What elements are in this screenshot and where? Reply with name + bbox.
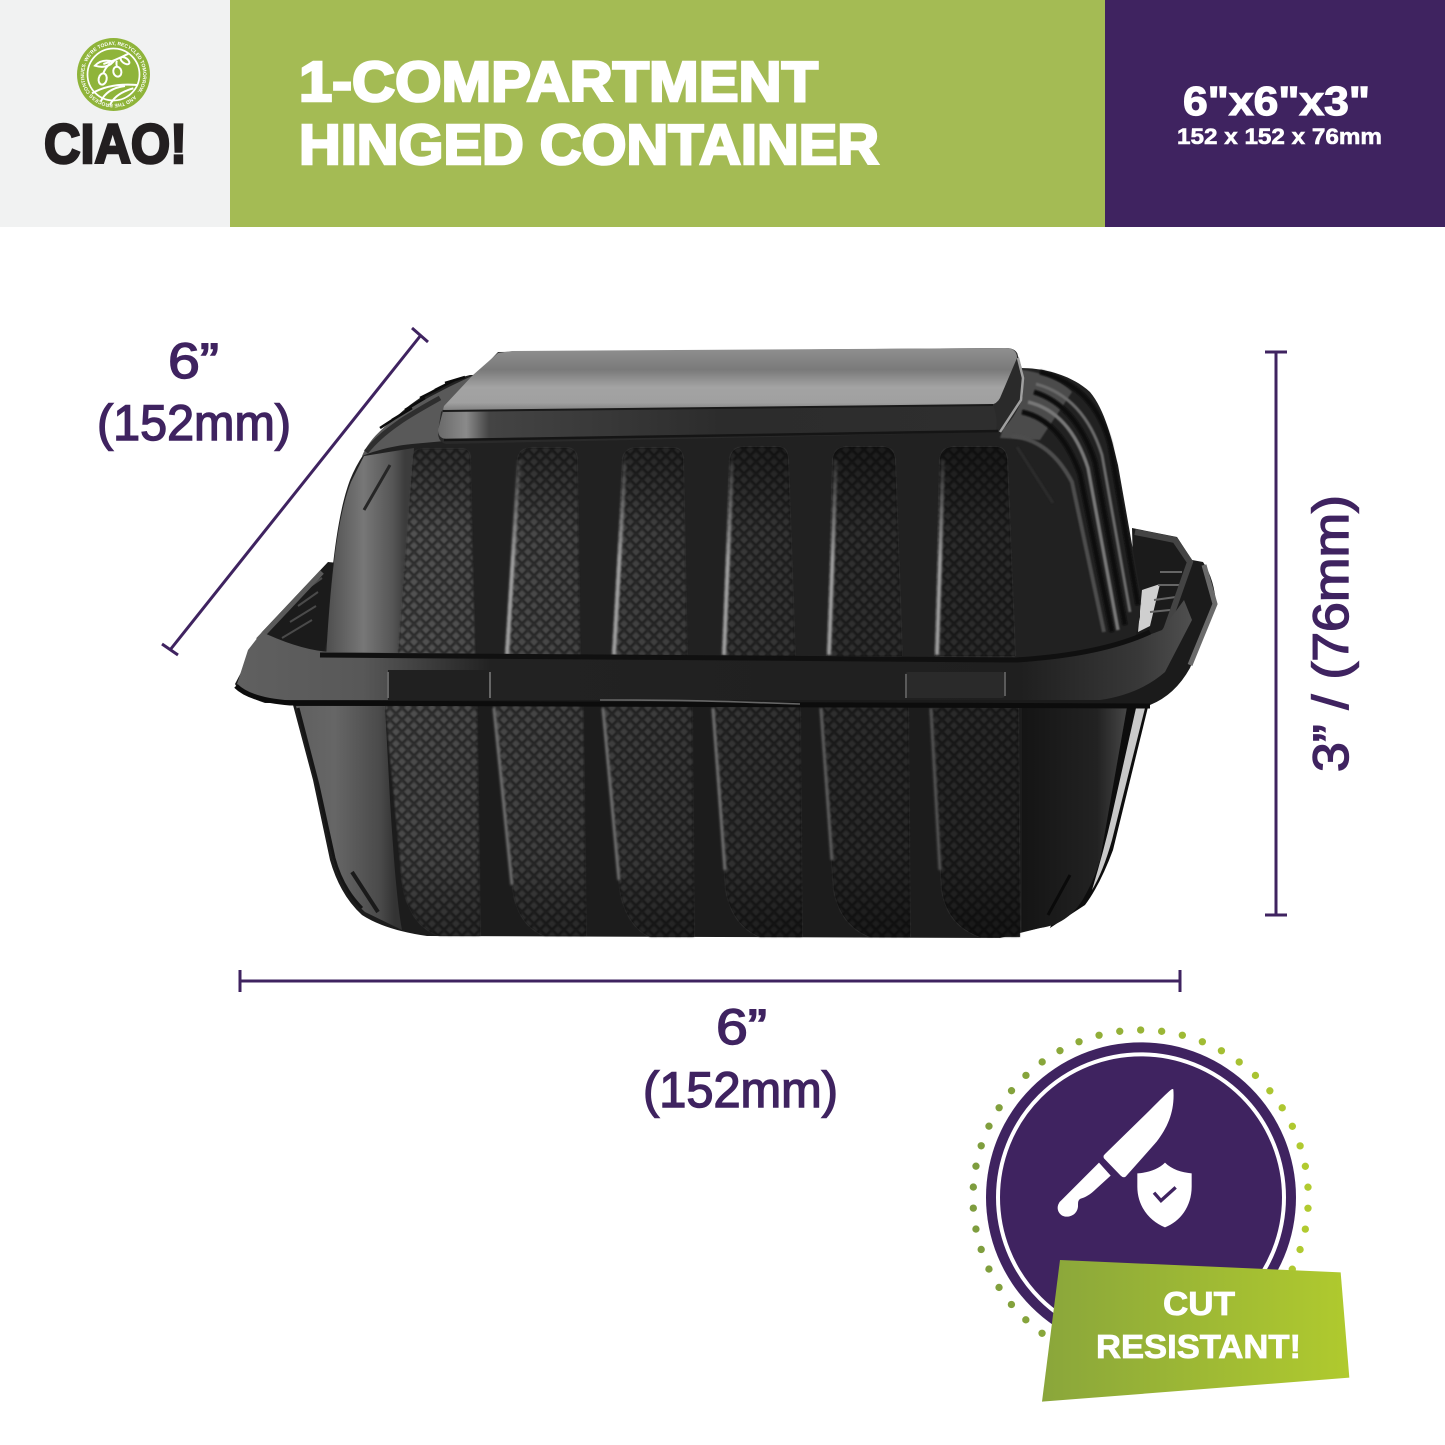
upper textured panels <box>398 447 1015 656</box>
lower body <box>293 705 1148 938</box>
left curved side <box>326 448 414 658</box>
dimension line: depth <box>162 328 428 655</box>
left flange grips <box>258 572 322 640</box>
icon: recycled olive logo seal: AND THE PROCESS CONTINUES. WE'RE TODAY, RECYCLED TOMORROW. <box>80 42 146 108</box>
width label: 6” <box>716 999 767 1055</box>
white inner ring <box>998 1054 1284 1340</box>
right edge with pale sliver <box>1050 707 1148 928</box>
width label: (152mm) <box>643 1062 838 1118</box>
depth label: (152mm) <box>97 395 291 451</box>
banner text <box>1096 1285 1301 1365</box>
panel edge highlights <box>507 460 943 655</box>
title <box>299 50 879 177</box>
logo panel <box>0 0 230 227</box>
banner text: CUT <box>1163 1285 1235 1322</box>
header bar <box>0 0 1445 227</box>
top lid tray <box>438 348 1023 444</box>
green banner <box>1042 1260 1349 1402</box>
rim flange silhouette <box>235 528 1216 705</box>
icon: shield with check <box>1137 1163 1192 1227</box>
width label <box>643 999 838 1118</box>
icon: knife <box>1058 1089 1174 1217</box>
height label: 3” / (76mm) <box>1303 495 1359 772</box>
product photo: black hinged container <box>235 348 1216 938</box>
front rim band <box>236 600 1192 706</box>
depth label: 6” <box>168 333 219 389</box>
size panel <box>1105 0 1445 227</box>
left shelf and ribs <box>362 376 472 456</box>
cut resistant badge <box>973 1030 1349 1402</box>
title: HINGED CONTAINER <box>299 113 879 177</box>
brand name: CIAO! <box>44 112 187 175</box>
right shelf highlight <box>1000 370 1072 440</box>
depth label <box>97 333 291 451</box>
dotted ring <box>973 1030 1308 1365</box>
banner text: RESISTANT! <box>1096 1328 1301 1365</box>
dimension line: height <box>1265 352 1287 915</box>
right ribs <box>1012 372 1138 632</box>
upper lid body <box>322 368 1140 660</box>
right latch <box>905 672 1005 698</box>
size in millimetres: 152 x 152 x 76mm <box>1177 124 1382 149</box>
title: 1-COMPARTMENT <box>299 50 818 114</box>
dimension line: width <box>240 970 1180 992</box>
purple disc <box>986 1042 1296 1352</box>
size in inches: 6"x6"x3" <box>1183 78 1370 124</box>
left latch <box>388 670 490 700</box>
title panel <box>230 0 1105 227</box>
right flange grips <box>1135 532 1215 665</box>
